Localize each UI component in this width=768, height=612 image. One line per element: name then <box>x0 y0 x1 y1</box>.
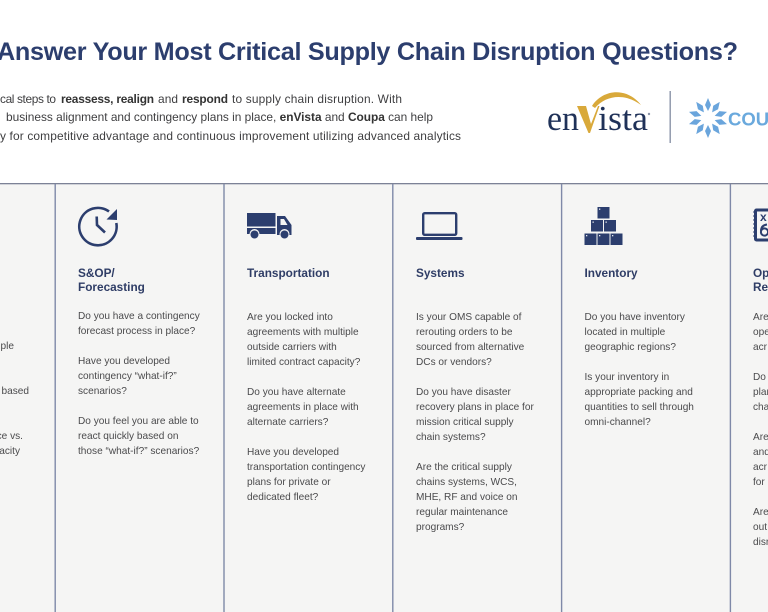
questions: Have you developed <box>247 447 339 458</box>
questions: chain systems? <box>416 432 486 443</box>
questions: rerouting orders to be <box>416 327 513 338</box>
questions: outside carriers with <box>247 342 337 353</box>
questions: agreements in place with <box>247 402 359 413</box>
icon: playbook <box>754 210 768 240</box>
icon: truck <box>247 213 292 239</box>
questions: those “what-if?” scenarios? <box>78 446 200 457</box>
panel background <box>0 184 768 612</box>
column dividers <box>54 184 731 612</box>
heading: S&OP/ <box>78 266 115 280</box>
questions: Do you have inventory <box>584 312 686 323</box>
top rule <box>0 183 768 184</box>
questions: appropriate packing and <box>584 387 693 398</box>
questions: Do you have disaster <box>416 387 511 398</box>
panel: clipped left column text: based <box>1 386 29 397</box>
icon: clock <box>79 208 117 245</box>
questions: Do <box>753 372 766 383</box>
questions: contingency “what-if?” <box>78 371 177 382</box>
questions: acr <box>753 342 768 353</box>
logo: enVista: ista <box>598 99 648 138</box>
questions <box>416 312 534 533</box>
questions: out <box>753 522 767 533</box>
questions <box>78 311 201 457</box>
questions: dedicated fleet? <box>247 492 319 503</box>
heading: Forecasting <box>78 280 145 294</box>
questions: chains systems, WCS, <box>416 477 517 488</box>
questions: Do you feel you are able to <box>78 416 199 427</box>
questions: plans for private or <box>247 477 331 488</box>
questions: Is your OMS capable of <box>416 312 522 323</box>
panel: clipped left column text: ple <box>1 341 14 352</box>
questions: DCs or vendors? <box>416 357 492 368</box>
questions: react quickly based on <box>78 431 178 442</box>
panel: Transportation <box>247 213 366 503</box>
questions: Are the critical supply <box>416 462 513 473</box>
heading: Transportation <box>247 266 330 280</box>
logo: enVista: en <box>547 99 579 138</box>
questions: scenarios? <box>78 386 127 397</box>
intro text: y for competitive advantage and continuous improvement utilizing advanced analytics <box>0 129 461 143</box>
questions: Do you have a contingency <box>78 311 201 322</box>
questions: mission critical supply <box>416 417 515 428</box>
title: Answer Your Most Critical Supply Chain Disruption Questions? <box>0 38 738 66</box>
questions: forecast process in place? <box>78 326 196 337</box>
questions: quantities to sell through <box>584 402 694 413</box>
panel: Systems <box>416 213 534 533</box>
heading: Re <box>753 280 768 294</box>
questions: located in multiple <box>584 327 666 338</box>
heading: Inventory <box>584 266 638 280</box>
questions <box>753 312 768 548</box>
icon: laptop <box>416 213 462 240</box>
questions: omni-channel? <box>584 417 651 428</box>
panel: clipped left column text <box>0 341 29 457</box>
questions: for <box>753 477 765 488</box>
questions: MHE, RF and voice on <box>416 492 518 503</box>
questions: Have you developed <box>78 356 170 367</box>
questions: programs? <box>416 522 465 533</box>
intro text: to supply chain disruption. With <box>232 92 402 106</box>
intro text: and <box>158 92 178 106</box>
questions: limited contract capacity? <box>247 357 361 368</box>
questions <box>584 312 694 428</box>
questions: regular maintenance <box>416 507 508 518</box>
questions: Do you have alternate <box>247 387 346 398</box>
questions: geographic regions? <box>584 342 676 353</box>
icon: playbook: x <box>760 210 767 224</box>
questions: Is your inventory in <box>584 372 669 383</box>
questions <box>247 312 366 503</box>
intro text: reassess, realign <box>61 92 154 106</box>
icon: boxes <box>584 207 622 245</box>
questions: alternate carriers? <box>247 417 329 428</box>
panel: S&OP/Forecasting <box>78 208 201 457</box>
logo: Coupa <box>688 98 768 138</box>
questions: recovery plans in place for <box>416 402 534 413</box>
questions: Are you locked into <box>247 312 333 323</box>
heading: Systems <box>416 266 465 280</box>
questions: agreements with multiple <box>247 327 359 338</box>
questions: sourced from alternative <box>416 342 525 353</box>
panel: Operations (clipped) <box>753 210 768 548</box>
logo divider <box>670 91 671 143</box>
intro text: business alignment and contingency plans in place, enVista and Coupa can help <box>6 110 433 124</box>
intro text <box>0 92 461 143</box>
intro text: respond <box>182 92 228 106</box>
logo: enVista <box>547 92 650 138</box>
intro text: cal steps to <box>0 92 56 106</box>
panel: Inventory <box>584 207 694 428</box>
questions: acr <box>753 462 768 473</box>
questions: transportation contingency <box>247 462 366 473</box>
